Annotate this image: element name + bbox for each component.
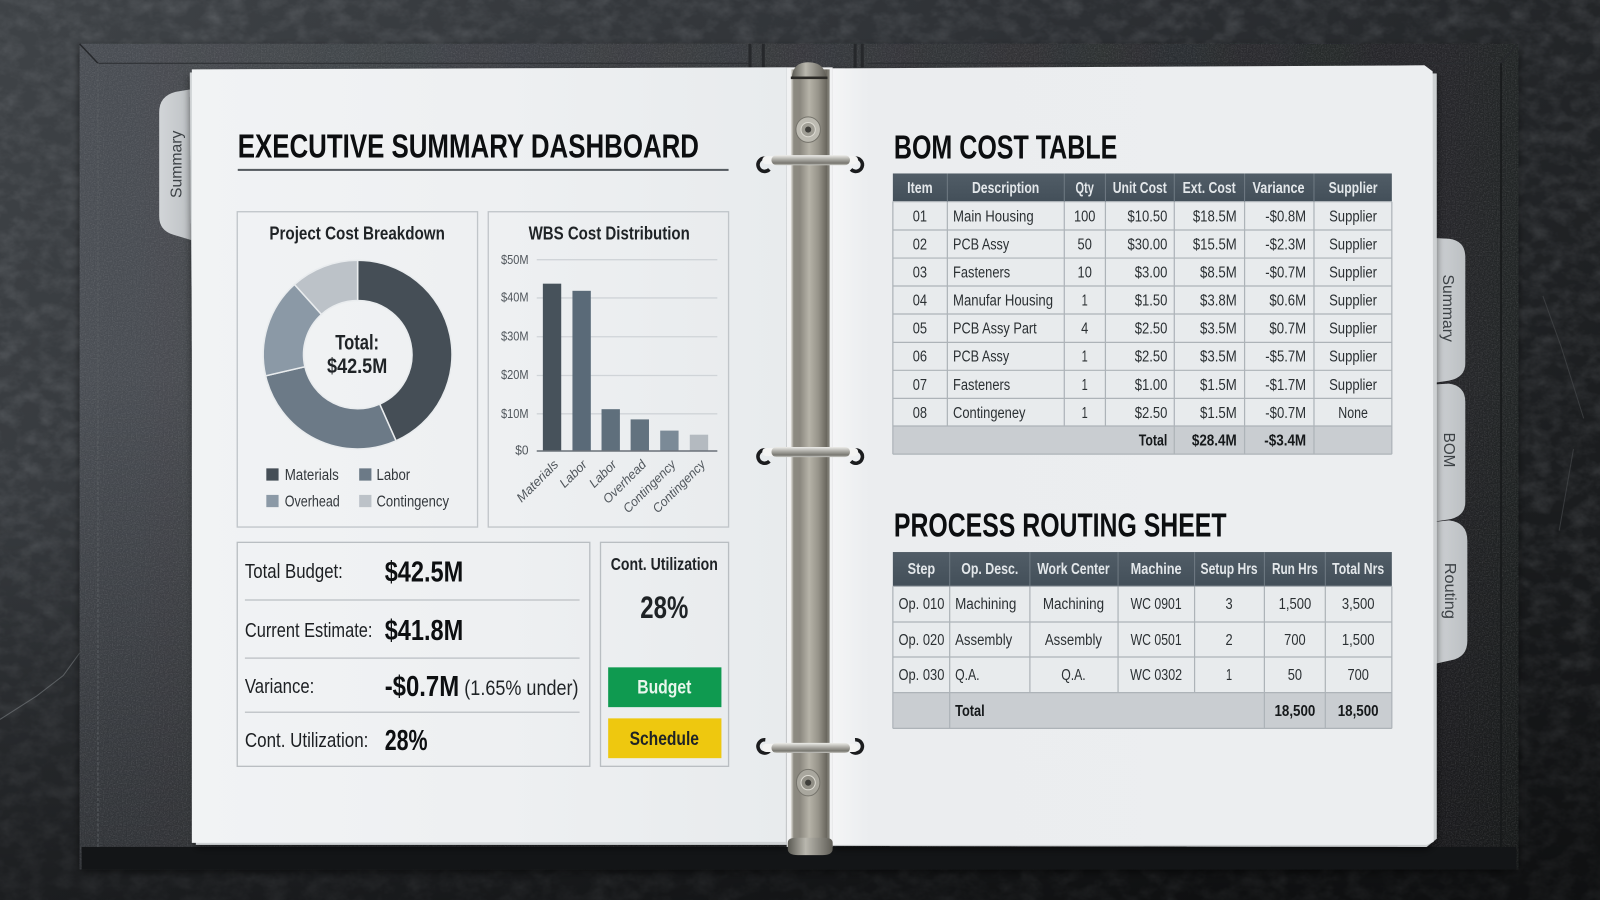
row Op. 020: 1,500: [1342, 632, 1375, 649]
KPI: current estimate: [245, 615, 463, 647]
row Op. 030: Q.A.: [1061, 667, 1086, 684]
row 04: $3.8M: [1200, 293, 1237, 310]
left index tab: Summary: [159, 89, 194, 241]
row 04: Supplier: [1329, 293, 1377, 310]
table header: Supplier: [1329, 180, 1378, 197]
row Op. 010: 3,500: [1342, 596, 1375, 613]
table: BOM cost: [893, 173, 1392, 454]
table header: Variance: [1253, 180, 1305, 197]
table header: Machine: [1131, 561, 1182, 578]
row 02: Supplier: [1329, 236, 1377, 253]
row Op. 020: 700: [1284, 632, 1306, 649]
row Op. 020: Op. 020: [898, 632, 945, 649]
row 07: 07: [913, 377, 927, 394]
row 08: [913, 405, 1368, 422]
right page: [833, 65, 1437, 847]
row 05: [913, 321, 1377, 338]
bar chart: Labor: [586, 456, 620, 491]
total row: [955, 703, 1379, 720]
row Op. 030: 700: [1347, 667, 1369, 684]
total row: [1139, 432, 1306, 449]
total row: 18,500: [1338, 703, 1379, 720]
KPI: total budget: Total Budget:: [245, 561, 343, 583]
row 07: Fasteners: [953, 377, 1010, 394]
table: process routing: [893, 552, 1392, 728]
row 01: Supplier: [1329, 208, 1377, 225]
donut chart: [263, 260, 452, 449]
row 04: 04: [913, 293, 927, 310]
row 01: 100: [1074, 208, 1096, 225]
row Op. 030: 1: [1226, 667, 1232, 684]
row 06: $2.50: [1135, 349, 1168, 366]
ring middle: [758, 447, 862, 463]
legend: Contingency: [377, 494, 449, 511]
row 05: $2.50: [1135, 321, 1168, 338]
row Op. 020: Assembly: [955, 632, 1012, 649]
row Op. 030: WC 0302: [1130, 667, 1182, 684]
rivet bottom: [796, 769, 820, 796]
row 05: PCB Assy Part: [953, 321, 1037, 338]
row Op. 030: [898, 667, 1369, 684]
KPI: contingency utilization: 28%: [385, 725, 428, 757]
row Op. 030: Q.A.: [955, 667, 980, 684]
badge: schedule: Schedule: [630, 728, 699, 750]
row 08: 1: [1082, 405, 1088, 422]
row 03: [913, 265, 1377, 282]
row 06: Supplier: [1329, 349, 1377, 366]
tab: Routing: [1429, 520, 1467, 665]
row Op. 010: Op. 010: [898, 596, 945, 613]
KPI: contingency utilization: [245, 725, 428, 757]
table header: Ext. Cost: [1183, 180, 1236, 197]
row 02: [913, 236, 1377, 253]
row 05: Supplier: [1329, 321, 1377, 338]
row 01: 01: [913, 208, 927, 225]
row Op. 010: Machining: [1043, 596, 1104, 613]
row 01: $18.5M: [1193, 208, 1237, 225]
row Op. 010: WC 0901: [1131, 596, 1182, 613]
row Op. 010: Machining: [955, 596, 1016, 613]
bar chart: Contingency: [620, 456, 680, 516]
row 06: -$5.7M: [1265, 349, 1306, 366]
row 08: Contingeney: [953, 405, 1026, 422]
row 08: -$0.7M: [1265, 405, 1306, 422]
right index tabs: [1429, 238, 1467, 665]
bottom cap: [788, 838, 833, 855]
top cap: [791, 62, 828, 79]
row 05: $3.5M: [1200, 321, 1237, 338]
total row: 18,500: [1274, 703, 1315, 720]
row 03: -$0.7M: [1265, 265, 1306, 282]
row 03: $8.5M: [1200, 265, 1237, 282]
table header: Description: [972, 180, 1039, 197]
ring bottom: [758, 740, 862, 753]
row Op. 010: 1,500: [1279, 596, 1311, 613]
rivet top: [796, 117, 820, 142]
legend: Labor: [377, 467, 410, 484]
left index tab: Summary: Summary: [169, 131, 186, 198]
table header: [907, 180, 1378, 197]
row 07: [913, 377, 1377, 394]
bar chart: [501, 252, 717, 516]
bar chart: $40M: [501, 290, 529, 305]
table header: Step: [908, 561, 935, 578]
heading: Executive Summary Dashboard: EXECUTIVE SUMMARY DASHBOARD: [238, 129, 699, 166]
row 05: $0.7M: [1269, 321, 1306, 338]
panel heading: WBS Cost Distribution: [529, 222, 690, 243]
row 02: -$2.3M: [1265, 236, 1306, 253]
total row: $28.4M: [1192, 432, 1237, 449]
bar chart: Labor: [556, 456, 590, 491]
KPI: variance: Variance:: [245, 676, 314, 698]
left page: [190, 67, 787, 845]
row 07: -$1.7M: [1265, 377, 1306, 394]
tab: BOM: BOM: [1440, 433, 1457, 467]
KPI: variance: -$0.7M: [385, 671, 459, 703]
row 03: Fasteners: [953, 265, 1010, 282]
row 04: 1: [1082, 293, 1088, 310]
row 04: $0.6M: [1269, 293, 1306, 310]
row Op. 020: 2: [1226, 632, 1233, 649]
tab: BOM: [1429, 384, 1465, 522]
table header: Setup Hrs: [1201, 561, 1258, 578]
binder spine mechanism: [787, 62, 833, 855]
panel: status: [601, 542, 729, 766]
row Op. 030: 50: [1288, 667, 1302, 684]
row Op. 020: Assembly: [1045, 632, 1102, 649]
row 01: $10.50: [1128, 208, 1168, 225]
row 06: $3.5M: [1200, 349, 1237, 366]
total row: Total: [1139, 432, 1167, 449]
panel heading: Project Cost Breakdown: [269, 222, 445, 243]
row 02: $30.00: [1128, 236, 1168, 253]
row 06: [913, 349, 1377, 366]
row 06: PCB Assy: [953, 349, 1009, 366]
row 02: 02: [913, 236, 927, 253]
row 03: 10: [1078, 265, 1092, 282]
total row: -$3.4M: [1264, 432, 1306, 449]
bar chart: Overhead: [599, 456, 650, 506]
bar chart: $20M: [501, 367, 529, 382]
KPI: total budget: [245, 557, 463, 589]
badge: budget: [608, 667, 721, 707]
KPI: current estimate: $41.8M: [385, 615, 463, 647]
heading: process routing sheet: PROCESS ROUTING SHEET: [894, 508, 1227, 545]
row 04: Manufar Housing: [953, 293, 1053, 310]
row 04: [913, 293, 1377, 310]
KPI: variance: (1.65% under): [464, 676, 579, 700]
bar chart: $10M: [501, 406, 529, 421]
table header: Qty: [1076, 180, 1094, 197]
row 02: 50: [1078, 236, 1092, 253]
table header: Work Center: [1037, 561, 1110, 578]
row Op. 030: Op. 030: [898, 667, 945, 684]
row 02: $15.5M: [1193, 236, 1237, 253]
table header: Unit Cost: [1113, 180, 1167, 197]
donut chart: Total:: [335, 330, 379, 354]
status value: 28%: [640, 589, 688, 625]
row 07: $1.00: [1135, 377, 1168, 394]
bar chart: Materials: [513, 456, 562, 505]
row 08: $1.5M: [1200, 405, 1237, 422]
legend: Materials: [285, 467, 339, 484]
tab: Summary: Summary: [1439, 274, 1456, 342]
badge: schedule: [608, 718, 721, 758]
row 07: Supplier: [1329, 377, 1377, 394]
row 03: $3.00: [1135, 265, 1168, 282]
panel: KPI summary: [237, 542, 590, 766]
bar chart: $50M: [501, 252, 529, 267]
row 07: 1: [1082, 377, 1088, 394]
row 05: 4: [1081, 321, 1088, 338]
row Op. 020: WC 0501: [1131, 632, 1182, 649]
row 01: Main Housing: [953, 208, 1034, 225]
row 06: 06: [913, 349, 927, 366]
panel: WBS cost distribution: [488, 212, 729, 527]
row Op. 010: 3: [1226, 596, 1233, 613]
badge: budget: Budget: [637, 676, 692, 698]
row 04: $1.50: [1135, 293, 1168, 310]
row 08: 08: [913, 405, 927, 422]
heading: BOM cost table: BOM COST TABLE: [894, 130, 1117, 167]
donut chart: $42.5M: [327, 354, 387, 378]
ring top: [758, 155, 862, 171]
KPI: variance: [245, 671, 579, 703]
KPI: current estimate: Current Estimate:: [245, 620, 372, 642]
row 07: $1.5M: [1200, 377, 1237, 394]
legend: [266, 467, 449, 511]
row 08: None: [1338, 405, 1368, 422]
table header: Total Nrs: [1332, 561, 1384, 578]
KPI: total budget: $42.5M: [385, 557, 463, 589]
table header: Item: [907, 180, 933, 197]
legend: Overhead: [285, 494, 340, 511]
row Op. 010: [898, 596, 1375, 613]
tab: Routing: Routing: [1441, 563, 1458, 619]
status heading: Cont. Utilization: [611, 554, 718, 574]
table header: Run Hrs: [1272, 561, 1318, 578]
row 01: [913, 208, 1377, 225]
panel: project cost breakdown: [237, 212, 478, 527]
row 02: PCB Assy: [953, 236, 1009, 253]
row 03: Supplier: [1329, 265, 1377, 282]
row 08: $2.50: [1135, 405, 1168, 422]
row 06: 1: [1082, 349, 1088, 366]
KPI: contingency utilization: Cont. Utilization:: [245, 730, 368, 752]
row 05: 05: [913, 321, 927, 338]
bar chart: $0: [515, 443, 529, 458]
bar chart: $30M: [501, 328, 529, 343]
row 01: -$0.8M: [1265, 208, 1306, 225]
total row: Total: [955, 703, 985, 720]
row 03: 03: [913, 265, 927, 282]
table header: Op. Desc.: [961, 561, 1018, 578]
bar chart: Contingency: [649, 456, 709, 516]
row Op. 020: [898, 632, 1375, 649]
tab: Summary: [1429, 238, 1465, 384]
table header: [908, 561, 1384, 578]
